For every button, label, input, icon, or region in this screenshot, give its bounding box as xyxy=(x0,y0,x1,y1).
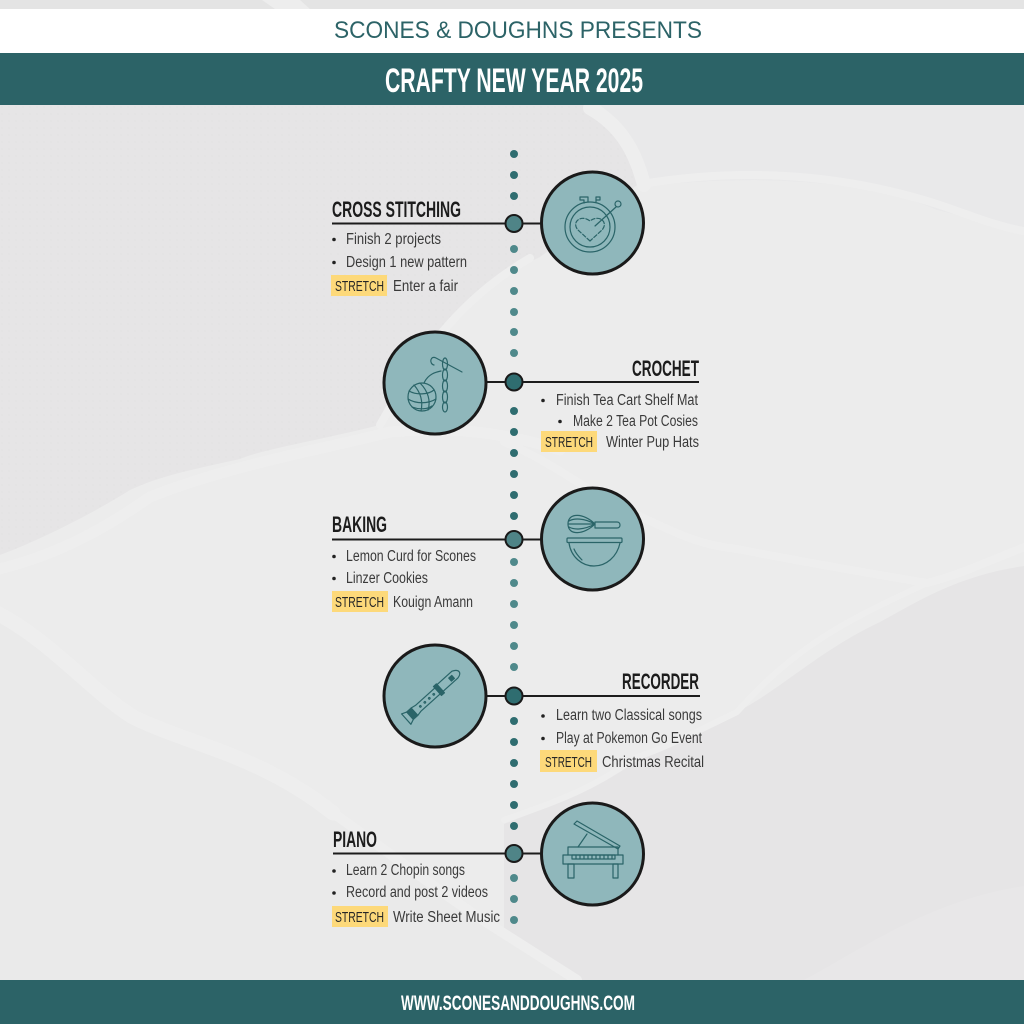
panel: recorder: RECORDER xyxy=(622,669,699,694)
header: presents banner: SCONES & DOUGHNS PRESENTS xyxy=(334,17,702,44)
panel: piano: Record and post 2 videos xyxy=(346,884,488,901)
panel: recorder: STRETCH xyxy=(545,754,592,771)
panel: cross stitching: Finish 2 projects xyxy=(346,231,441,248)
panel: recorder: Christmas Recital xyxy=(602,754,704,771)
timeline dots xyxy=(510,150,518,924)
footer banner xyxy=(0,980,1024,1024)
panel: cross stitching: Enter a fair xyxy=(393,278,458,295)
panel: cross stitching: STRETCH xyxy=(335,278,384,295)
panel: piano xyxy=(332,803,644,927)
icon: yarn and hook xyxy=(408,357,462,412)
panel: baking xyxy=(332,488,644,612)
panel: piano: Write Sheet Music xyxy=(393,909,500,926)
panel: recorder: Play at Pokemon Go Event xyxy=(556,730,703,747)
title banner xyxy=(0,53,1024,105)
panel: recorder: Learn two Classical songs xyxy=(556,707,702,724)
panel: cross stitching xyxy=(331,172,644,296)
panel: piano: PIANO xyxy=(333,827,377,852)
header: presents banner xyxy=(0,9,1024,53)
icon: whisk and bowl xyxy=(567,515,622,566)
panel: piano: Learn 2 Chopin songs xyxy=(346,862,465,879)
panel: cross stitching: Design 1 new pattern xyxy=(346,254,467,271)
icon: embroidery hoop xyxy=(565,197,621,252)
icon: grand piano xyxy=(563,821,623,878)
panel: crochet: Finish Tea Cart Shelf Mat xyxy=(556,392,699,409)
icon: recorder flute xyxy=(402,666,464,724)
footer banner: WWW.SCONESANDDOUGHNS.COM xyxy=(401,992,635,1015)
panel: crochet: Make 2 Tea Pot Cosies xyxy=(573,413,698,430)
panel: baking: STRETCH xyxy=(335,594,384,611)
panel: crochet xyxy=(384,332,699,452)
panel: baking: Lemon Curd for Scones xyxy=(346,548,476,565)
panel: crochet: CROCHET xyxy=(632,356,699,381)
panel: crochet: STRETCH xyxy=(545,434,593,451)
title banner: CRAFTY NEW YEAR 2025 xyxy=(385,62,643,100)
panel: baking: Kouign Amann xyxy=(393,594,473,611)
panel: recorder xyxy=(384,645,704,772)
panel: baking: BAKING xyxy=(332,512,387,537)
panel: crochet: Winter Pup Hats xyxy=(606,434,699,451)
panel: cross stitching: CROSS STITCHING xyxy=(332,197,461,222)
panel: baking: Linzer Cookies xyxy=(346,570,428,587)
panel: piano: STRETCH xyxy=(335,909,384,926)
header: top strip xyxy=(0,0,1024,9)
